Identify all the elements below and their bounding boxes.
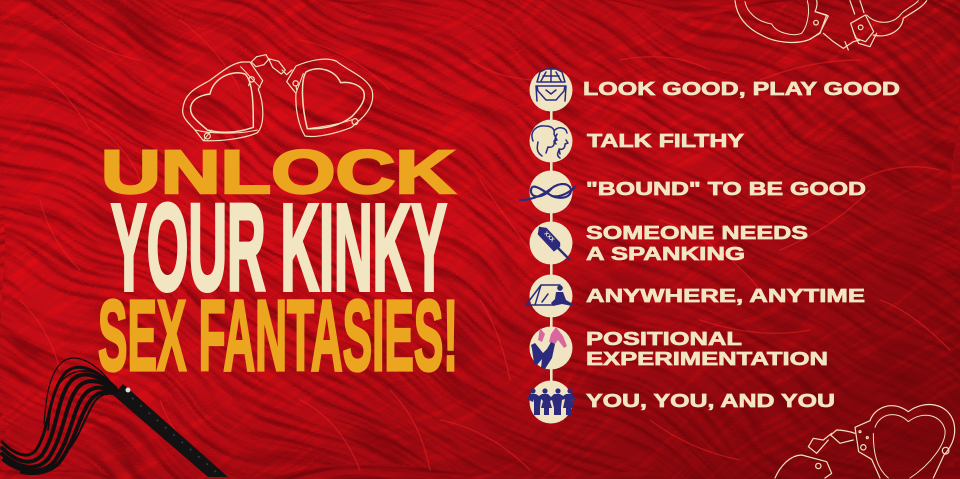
- title line: UNLOCK: UNLOCK: [101, 138, 455, 206]
- list item 3: [520, 170, 866, 214]
- label: A SPANKING: [586, 243, 745, 264]
- icon: tent and couple: [526, 274, 573, 318]
- whip: [2, 358, 228, 477]
- icon: two faces: [530, 120, 572, 162]
- label: ANYWHERE, ANYTIME: [586, 285, 865, 306]
- list item 1: [530, 68, 900, 112]
- label: TALK FILTHY: [587, 130, 745, 151]
- handcuffs: top right corner: [735, 1, 927, 50]
- list item 2: [530, 120, 745, 162]
- whip stud: [126, 388, 130, 392]
- list item 5: [526, 274, 865, 318]
- label: YOU, YOU, AND YOU: [586, 390, 835, 411]
- text: SEX FANTASIES!: [98, 280, 458, 392]
- icon: lingerie: [530, 68, 572, 112]
- label: [586, 222, 808, 264]
- whip grip highlights: [132, 398, 216, 472]
- list item 7: [527, 380, 835, 424]
- label: [586, 328, 828, 369]
- label: SOMEONE NEEDS: [586, 222, 808, 243]
- handcuffs: top centre: [183, 55, 373, 141]
- handcuffs: bottom right corner: [775, 404, 955, 478]
- icon: paddle: [530, 222, 572, 264]
- icon: paddle: XXX: [542, 231, 555, 244]
- title: [98, 138, 458, 392]
- icon: rope knot: [520, 170, 575, 214]
- label: EXPERIMENTATION: [586, 348, 828, 369]
- whip tails: [2, 358, 116, 473]
- list item 6: [530, 326, 828, 370]
- whip handle: [113, 384, 228, 477]
- list item 4: [530, 222, 808, 264]
- icon: group of four: [527, 380, 576, 424]
- timeline connector: [550, 100, 553, 390]
- icon: position figures: [530, 326, 572, 370]
- label: "BOUND" TO BE GOOD: [586, 178, 866, 199]
- text: YOUR KINKY: [111, 180, 447, 317]
- label: LOOK GOOD, PLAY GOOD: [583, 78, 900, 99]
- label: POSITIONAL: [586, 328, 742, 349]
